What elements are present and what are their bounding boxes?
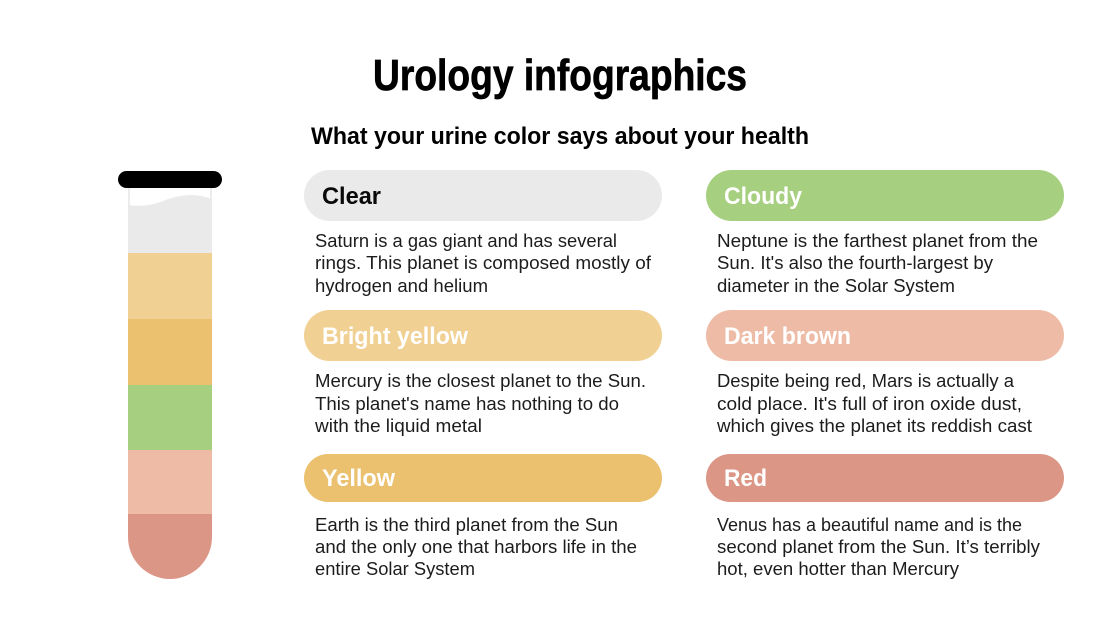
- description: [315, 231, 652, 296]
- description: Venus has a beautiful name and is the: [717, 515, 1022, 535]
- heading: Dark brown: [724, 323, 851, 350]
- description: which gives the planet its reddish cast: [716, 416, 1032, 436]
- band: red: [128, 514, 212, 579]
- description: Saturn is a gas giant and has several: [315, 231, 617, 251]
- panel: dark brown: [706, 310, 1064, 436]
- description: [314, 371, 646, 436]
- description: Mercury is the closest planet to the Sun.: [315, 371, 646, 391]
- title: Urology infographics: [373, 51, 747, 100]
- description: [315, 515, 637, 579]
- band: bright yellow: [128, 253, 212, 319]
- description: diameter in the Solar System: [717, 276, 955, 296]
- description: cold place. It's full of iron oxide dust,: [717, 394, 1022, 414]
- band: yellow: [128, 319, 212, 385]
- panel: yellow: [304, 454, 662, 579]
- heading: Red: [724, 465, 767, 492]
- pill: [706, 310, 1064, 361]
- panel: cloudy: [706, 170, 1064, 296]
- panel: bright yellow: [304, 310, 662, 436]
- pill: [706, 170, 1064, 221]
- panel: clear: [304, 170, 662, 296]
- subtitle: What your urine color says about your health: [311, 123, 809, 150]
- pill: [304, 310, 662, 361]
- description: [717, 231, 1038, 296]
- description: hydrogen and helium: [315, 276, 488, 296]
- heading: Cloudy: [724, 183, 803, 210]
- description: Earth is the third planet from the Sun: [315, 515, 618, 535]
- description: [716, 371, 1032, 436]
- description: Sun. It's also the fourth-largest by: [717, 253, 993, 273]
- band: clear: [128, 195, 212, 253]
- tube cap: [118, 171, 222, 188]
- description: rings. This planet is composed mostly of: [315, 253, 652, 273]
- description: Despite being red, Mars is actually a: [717, 371, 1015, 391]
- description: second planet from the Sun. It’s terribly: [717, 537, 1040, 557]
- heading: Bright yellow: [322, 323, 468, 350]
- description: hot, even hotter than Mercury: [717, 559, 959, 579]
- pill: [706, 454, 1064, 502]
- pill: [304, 170, 662, 221]
- description: and the only one that harbors life in the: [315, 537, 637, 557]
- heading: Yellow: [322, 465, 395, 492]
- test tube illustration: [118, 171, 222, 579]
- description: Neptune is the farthest planet from the: [717, 231, 1038, 251]
- tube outline: [129, 180, 211, 253]
- description: [717, 515, 1040, 579]
- description: with the liquid metal: [314, 416, 482, 436]
- description: This planet's name has nothing to do: [315, 394, 619, 414]
- heading: Clear: [322, 183, 381, 210]
- band: dark brown: [128, 450, 212, 514]
- band: green: [128, 385, 212, 450]
- pill: [304, 454, 662, 502]
- description: entire Solar System: [315, 559, 475, 579]
- panel: red: [706, 454, 1064, 579]
